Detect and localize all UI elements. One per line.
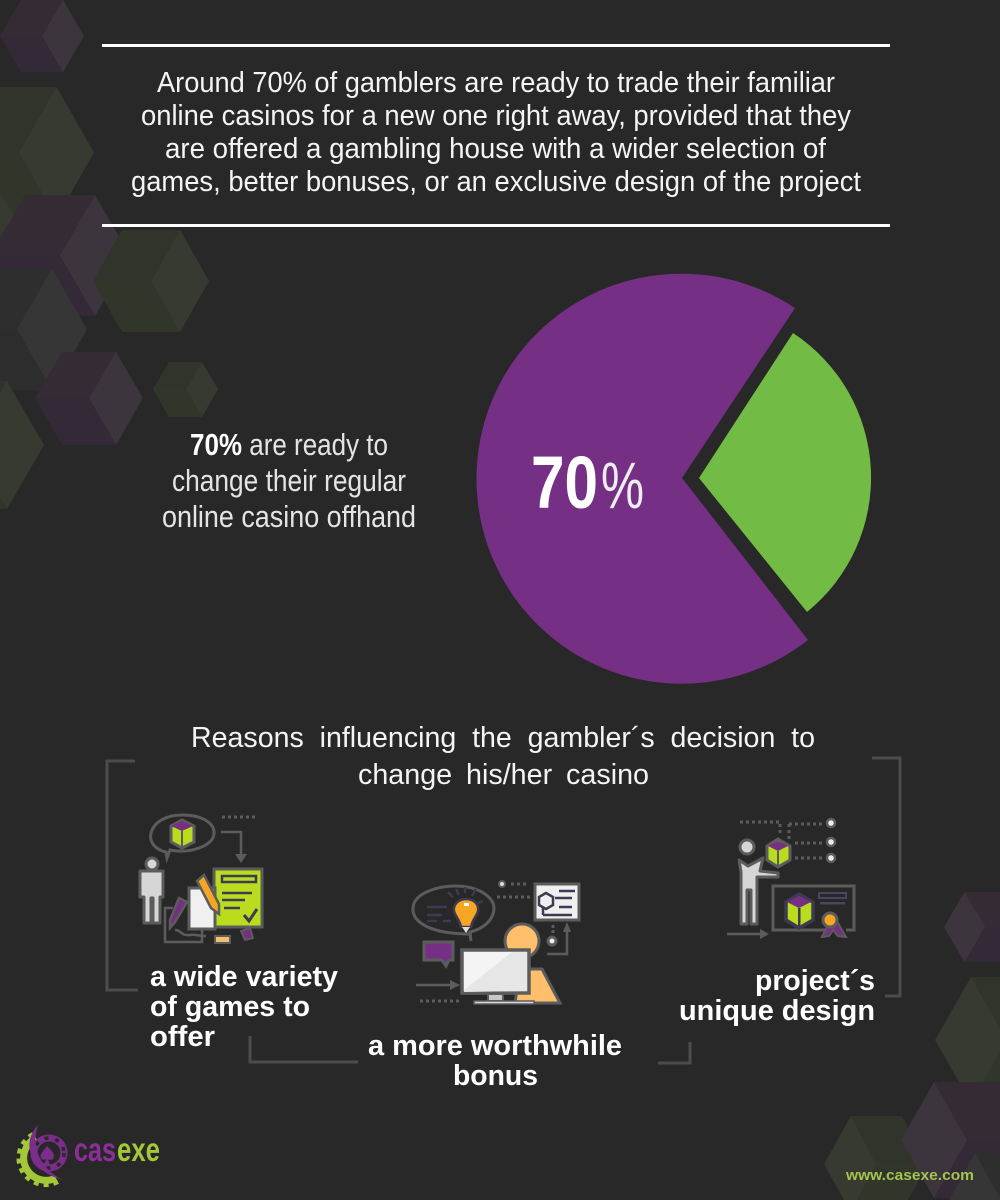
green document <box>214 869 262 927</box>
logo gear <box>18 1134 58 1185</box>
light bulb <box>454 899 478 927</box>
logo chip <box>34 1138 64 1168</box>
bottom rule <box>102 224 890 227</box>
intro text: online casinos for a new one right away, provided that they <box>141 100 851 132</box>
monitor <box>462 950 529 993</box>
pie side caption <box>162 427 416 534</box>
board <box>535 884 579 920</box>
person <box>505 924 539 958</box>
presenter <box>740 840 754 854</box>
label: wide variety: offer <box>150 1021 215 1053</box>
certificate board <box>773 886 854 930</box>
intro text: are offered a gambling house with a wider selection of <box>165 133 827 165</box>
website url: www.casexe.com <box>845 1167 974 1184</box>
icon: person with document <box>140 815 262 943</box>
purple pen <box>170 898 187 928</box>
pie chart <box>476 274 871 684</box>
ribbon badge <box>822 923 846 937</box>
logo <box>18 1124 160 1185</box>
pie side caption: 70% are ready to <box>190 427 388 462</box>
dots <box>499 881 505 887</box>
label: wide variety <box>150 961 338 1053</box>
dotted line <box>222 816 255 818</box>
label: worthwhile bonus: bonus <box>453 1060 538 1092</box>
label: unique design: unique design <box>679 995 875 1027</box>
arrow <box>727 933 761 935</box>
top rule <box>102 44 890 47</box>
pie side caption: online casino offhand <box>162 499 416 534</box>
label: unique design: project´s <box>755 965 875 997</box>
logo wordmark <box>74 1131 160 1168</box>
logo wordmark: cas <box>74 1131 116 1168</box>
dotted connectors <box>740 822 822 858</box>
green slice 30% <box>699 333 871 612</box>
intro text <box>131 67 861 198</box>
small tag <box>215 936 230 943</box>
arrow <box>221 832 241 854</box>
icon: person at computer with idea <box>413 881 579 1004</box>
small marker <box>241 928 253 940</box>
background cubes: top left <box>0 0 218 509</box>
white page <box>189 888 215 929</box>
logo wordmark: exe <box>117 1131 160 1168</box>
dotted line below <box>420 1000 462 1002</box>
label: worthwhile bonus <box>368 1030 622 1092</box>
certificate cube <box>786 894 813 928</box>
intro text: games, better bonuses, or an exclusive design of the project <box>131 166 861 198</box>
small cube <box>767 839 790 867</box>
label: wide variety: of games to <box>150 991 310 1023</box>
intro text: Around 70% of gamblers are ready to trade their familiar <box>157 67 835 99</box>
pie side caption: change their regular <box>172 463 406 498</box>
icon: presenter with certificate <box>727 819 854 939</box>
sheet outline <box>165 908 206 942</box>
label: worthwhile bonus: a more worthwhile <box>368 1030 622 1062</box>
pie value label: 70 <box>531 441 598 524</box>
pie value label: % <box>601 448 644 522</box>
connector with dot <box>552 925 554 933</box>
orange pencil <box>197 875 219 914</box>
purple chat bubble <box>424 942 453 966</box>
arrow to monitor <box>416 984 451 986</box>
bracket frame <box>107 758 900 1063</box>
logo spade <box>40 1146 54 1165</box>
text lines in bubble <box>427 907 451 921</box>
certificate lines <box>819 893 846 898</box>
purple slice 70% <box>476 274 808 684</box>
label: unique design <box>679 965 875 1027</box>
label: wide variety: a wide variety <box>150 961 338 993</box>
background cubes: bottom right <box>824 892 1000 1200</box>
thought bubble <box>413 886 494 941</box>
speech bubble with cube <box>151 815 214 858</box>
reasons heading <box>191 722 815 791</box>
reasons heading: change his/her casino <box>358 759 649 791</box>
person <box>146 858 158 870</box>
reasons heading: Reasons influencing the gambler´s decision to <box>191 722 815 754</box>
